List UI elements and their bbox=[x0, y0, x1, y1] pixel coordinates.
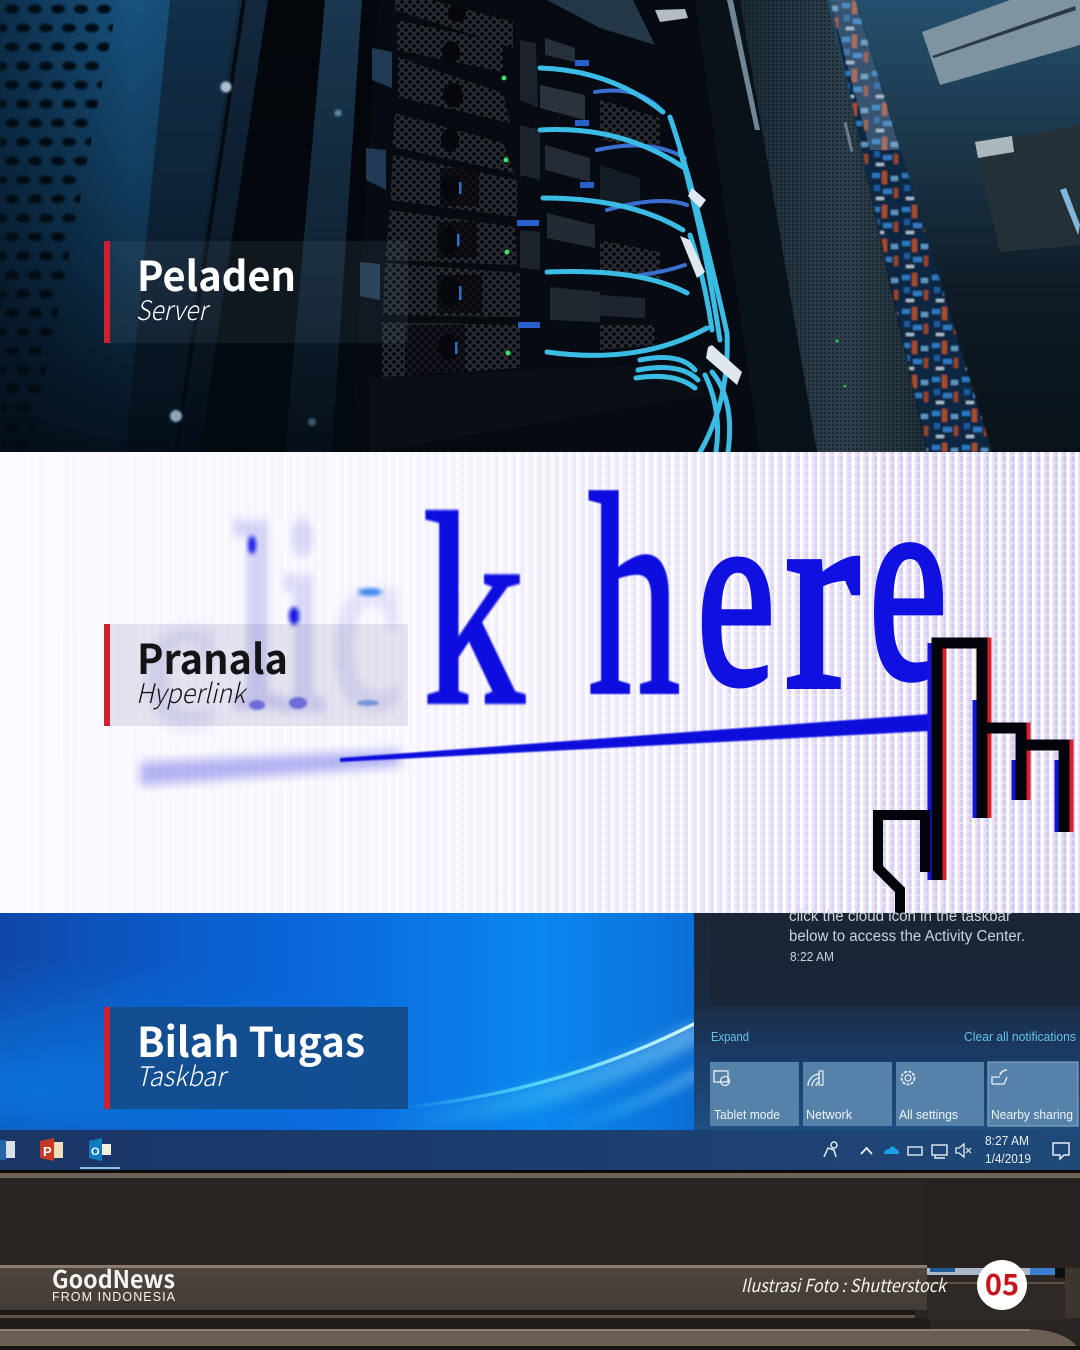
label: Pranala: Hyperlink bbox=[136, 672, 248, 711]
out-of-focus letters: c bbox=[145, 554, 217, 764]
click here text: e bbox=[697, 450, 775, 741]
out-of-focus letters: c bbox=[332, 492, 401, 757]
icon: outlook bbox=[89, 1138, 111, 1161]
click here text: k bbox=[423, 459, 525, 762]
system tray icons bbox=[824, 1142, 971, 1158]
top chassis beam bbox=[547, 0, 655, 45]
notification text: below to access the Activity Center. bbox=[789, 928, 1025, 945]
green status LEDs bbox=[502, 76, 510, 356]
notification actions: Clear all notifications bbox=[964, 1030, 1076, 1044]
quick action tile: all settings bbox=[896, 1062, 984, 1126]
active app underline bbox=[80, 1167, 120, 1169]
click here text: h bbox=[588, 437, 680, 755]
panel: server photo bbox=[0, 0, 1080, 452]
page number badge bbox=[977, 1260, 1027, 1310]
notification text bbox=[789, 908, 1025, 964]
quick action tile: tablet mode bbox=[710, 1062, 799, 1126]
white cable tags bbox=[655, 9, 742, 385]
panel: taskbar photo bbox=[0, 908, 1080, 1175]
icon: powerpoint: P bbox=[43, 1144, 52, 1159]
wallpaper light streaks bbox=[380, 1024, 694, 1130]
notification text: 8:22 AM bbox=[790, 950, 834, 964]
clock bbox=[985, 1134, 1031, 1166]
icon: action center bbox=[1053, 1143, 1069, 1159]
drive handles bbox=[405, 4, 482, 375]
icon: word bbox=[0, 1140, 15, 1160]
click here text bbox=[423, 427, 947, 762]
quick action tile: all settings: All settings bbox=[899, 1108, 958, 1122]
background room bbox=[827, 0, 1080, 452]
next line of text, dark bbox=[878, 643, 1068, 913]
rack door bbox=[695, 0, 927, 452]
notification text: click the cloud icon in the taskbar bbox=[789, 908, 1011, 925]
label: Bilah Tugas: Bilah Tugas bbox=[137, 1009, 365, 1069]
photo credit: Ilustrasi Foto : Shutterstock bbox=[741, 1272, 948, 1298]
side modules bbox=[520, 38, 660, 350]
page number badge: 05 bbox=[985, 1262, 1019, 1304]
background equipment bbox=[830, 0, 1080, 452]
icon: outlook: O bbox=[91, 1146, 100, 1158]
rack back, dark interior bbox=[350, 0, 770, 452]
logo: GoodNews from Indonesia: GoodNews bbox=[52, 1260, 175, 1295]
taskbar bbox=[0, 1130, 1080, 1175]
label: Peladen bbox=[104, 241, 408, 343]
notification actions: Expand bbox=[711, 1030, 749, 1044]
lower trim band bbox=[0, 1265, 930, 1329]
label: Pranala bbox=[104, 624, 408, 726]
quick action tile: network bbox=[803, 1062, 892, 1126]
screen pixel grid bbox=[428, 452, 1080, 913]
quick action tile: nearby sharing bbox=[988, 1062, 1078, 1126]
cables bbox=[540, 68, 730, 452]
quick action tile: network: Network bbox=[806, 1108, 853, 1122]
rack post bbox=[0, 0, 395, 452]
click here text: e bbox=[869, 427, 947, 738]
notification actions bbox=[711, 1030, 1076, 1044]
server units bbox=[382, 0, 520, 377]
icon: powerpoint bbox=[40, 1138, 63, 1161]
lower rail bbox=[370, 362, 705, 452]
quick action tile: tablet mode: Tablet mode bbox=[714, 1108, 780, 1122]
quick action tile: nearby sharing: Nearby sharing bbox=[991, 1108, 1073, 1122]
clock: 8:27 AM bbox=[985, 1134, 1029, 1148]
rack ears with labels bbox=[360, 48, 392, 300]
out-of-focus letters bbox=[145, 458, 401, 769]
notification panel bbox=[694, 908, 1080, 1130]
hinge slot bbox=[927, 1268, 1080, 1320]
label: Peladen: Server bbox=[136, 289, 211, 328]
label: Pranala: Pranala bbox=[137, 626, 288, 686]
out-of-focus letters: l bbox=[232, 473, 283, 762]
link underline bbox=[140, 714, 930, 786]
perforated rack door at left bbox=[0, 0, 240, 452]
label: Bilah Tugas: Taskbar bbox=[136, 1055, 229, 1094]
click here text: r bbox=[785, 446, 860, 745]
blue cable connectors bbox=[517, 60, 594, 328]
label: Peladen: Peladen bbox=[137, 243, 296, 303]
label: Bilah Tugas bbox=[104, 1007, 408, 1109]
panel: laptop bezel bbox=[0, 1173, 1080, 1350]
clock: 1/4/2019 bbox=[985, 1152, 1031, 1166]
logo: GoodNews from Indonesia: FROM INDONESIA bbox=[52, 1290, 176, 1304]
panel: hyperlink photo bbox=[0, 427, 1080, 913]
out-of-focus letters: i bbox=[280, 458, 327, 769]
bottom lip bbox=[0, 1329, 1080, 1350]
